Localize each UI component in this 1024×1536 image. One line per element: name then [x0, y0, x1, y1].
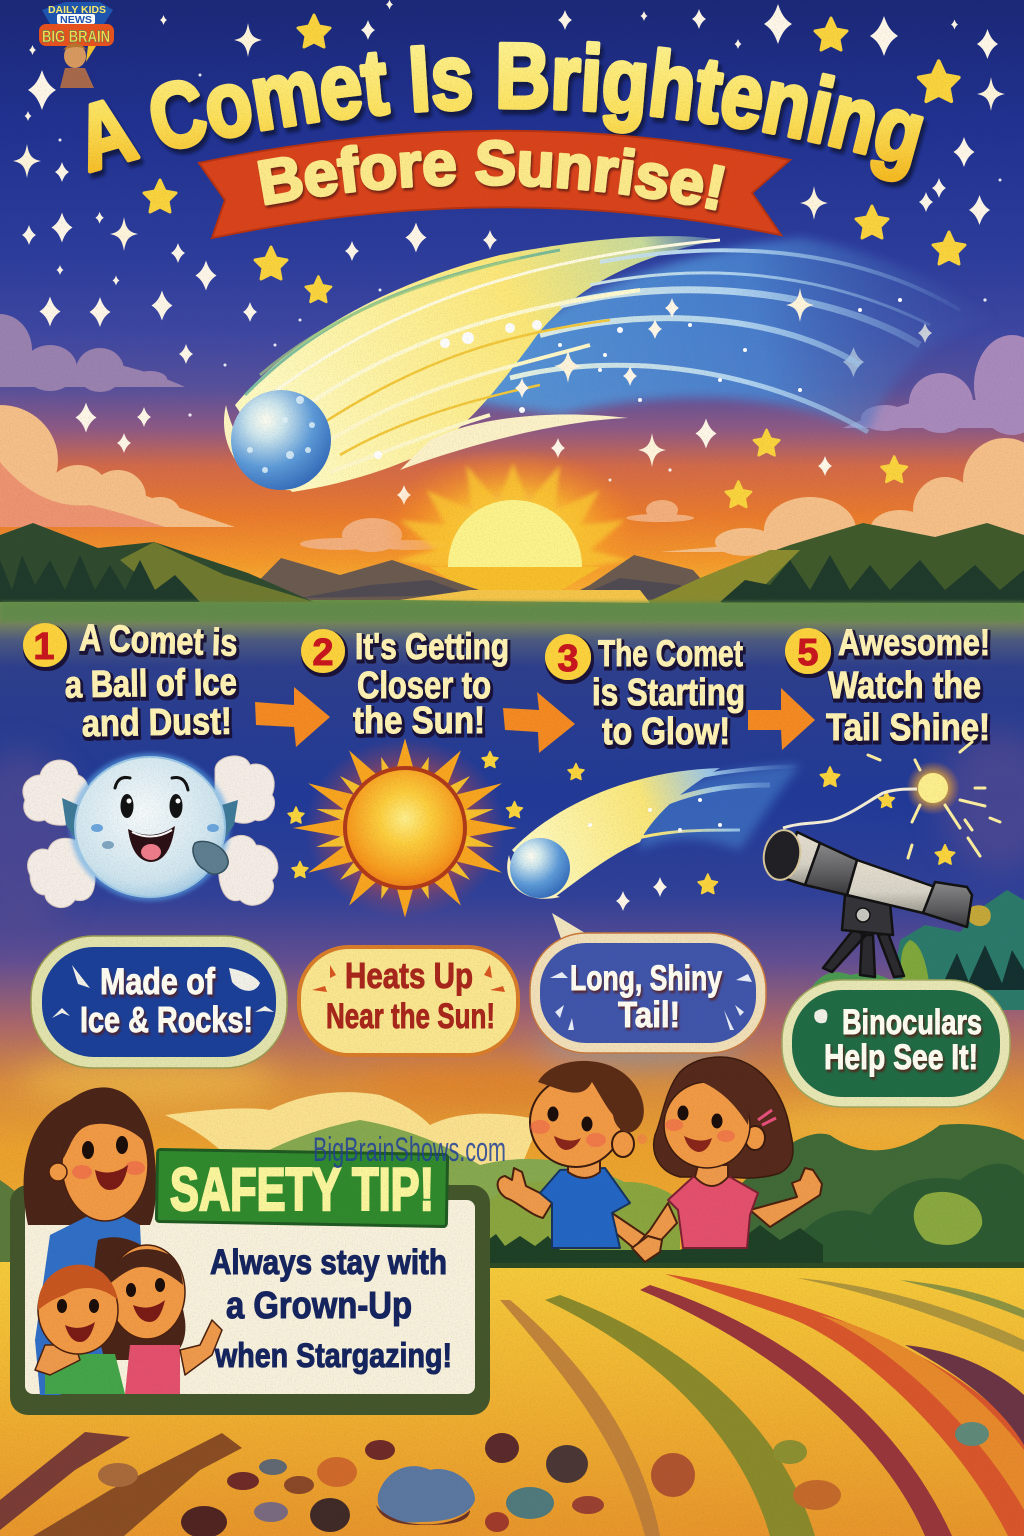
safety tip message: when Stargazing!: [214, 1337, 452, 1375]
clouds around the comet: [23, 756, 278, 908]
speech bubble: Made of Ice & Rocks!: Ice & Rocks!: [80, 999, 253, 1040]
spark burst viewed by telescope: [783, 742, 1000, 858]
main title: A Comet Is Brightening: [88, 40, 928, 189]
step 3 caption: The Comet is Starting to Glow!: [545, 633, 745, 753]
speech bubble: Long, Shiny Tail!: Tail!: [618, 994, 680, 1035]
ground strip under mountains: [0, 602, 1024, 622]
two children holding hands: [488, 1057, 823, 1263]
arrow: step 2 to 3: [503, 692, 575, 753]
speech bubble: Heats Up Near the Sun!: Near the Sun!: [326, 997, 495, 1036]
step 1 number badge: 1: [33, 626, 55, 668]
logo: Daily Kids News Big Brain: [39, 2, 114, 88]
subtitle ribbon: [197, 130, 792, 240]
golden striped field: [0, 1262, 1024, 1536]
step 5 caption: Awesome! Watch the Tail Shine!: Awesome!: [838, 622, 990, 663]
big sun with spiky rays: [288, 738, 522, 918]
watermark: BigBrainShows.com: [313, 1131, 506, 1169]
step 5 number badge: 5: [797, 632, 819, 674]
speech bubble: Heats Up Near the Sun!: Heats Up: [345, 955, 473, 996]
speech bubble: Made of Ice & Rocks!: [31, 936, 287, 1068]
green hill behind telescope: [810, 890, 1024, 1010]
safety tip message: [210, 1243, 452, 1375]
step 3 caption: The Comet is Starting to Glow!: The Comet: [598, 633, 743, 674]
small glowing comet: [507, 765, 800, 899]
speech bubble: Long, Shiny Tail!: [530, 913, 766, 1053]
small stars around comet and telescope: [568, 764, 955, 911]
speech bubble: Binoculars Help See It!: Help See It!: [824, 1038, 978, 1077]
step 2 caption: It's Getting Closer to the Sun!: the Sun!: [353, 700, 485, 742]
distant hills and pale cloud behind the children: [0, 1092, 1024, 1262]
safety tip banner: [156, 1149, 448, 1227]
step 1 number badge: [23, 623, 67, 668]
girl: [635, 1057, 822, 1252]
mountain range and treeline: [0, 523, 1024, 603]
step 2 caption: It's Getting Closer to the Sun!: Closer to: [357, 665, 491, 707]
speech bubble: Binoculars Help See It!: [782, 980, 1010, 1107]
clouds in dawn sky: [0, 314, 1024, 563]
subtitle ribbon: Before Sunrise!: [257, 139, 728, 214]
arrow: step 3 to 5: [748, 688, 815, 750]
panel paper: [25, 1200, 475, 1394]
logo: Daily Kids News Big Brain: NEWS: [60, 15, 92, 26]
boy: [498, 1061, 649, 1250]
mother and two children: [24, 1087, 222, 1395]
star field: [13, 0, 1005, 507]
telescope on tripod: [760, 827, 972, 977]
step 5 caption: Awesome! Watch the Tail Shine!: [785, 622, 990, 749]
safety tip banner: SAFETY TIP!: [170, 1156, 434, 1223]
step 3 caption: The Comet is Starting to Glow!: is Starting: [592, 672, 745, 714]
step 1 caption: A Comet is a Ball of Ice and Dust!: and Dust!: [81, 701, 232, 745]
speech bubble: Binoculars Help See It!: Binoculars: [842, 1003, 982, 1042]
step 3 caption: The Comet is Starting to Glow!: to Glow!: [602, 711, 730, 753]
speech bubble: Heats Up Near the Sun!: [297, 945, 520, 1057]
smiling ice-and-rock comet character: [23, 753, 278, 908]
arrow: step 1 to 2: [255, 687, 330, 747]
step 2 number badge: 2: [312, 632, 334, 674]
logo: Daily Kids News Big Brain: BIG BRAIN: [42, 27, 110, 46]
grass strip: [488, 1225, 823, 1263]
background: warm blotches in the lower band: [0, 730, 1024, 1145]
step 5 caption: Awesome! Watch the Tail Shine!: Tail Shine!: [826, 707, 990, 749]
background: middle band from deep blue to orange: [0, 600, 1024, 1270]
step 1 caption: A Comet is a Ball of Ice and Dust!: A Comet is: [79, 617, 238, 665]
background: night-to-dawn sky: [0, 0, 1024, 605]
speech bubble: Long, Shiny Tail!: Long, Shiny: [570, 959, 722, 998]
speech bubble: Made of Ice & Rocks!: Made of: [100, 961, 216, 1002]
safety tip message: a Grown-Up: [226, 1285, 412, 1327]
step 2 caption: It's Getting Closer to the Sun!: [301, 626, 509, 742]
safety tip message: Always stay with: [210, 1243, 447, 1282]
step 5 number badge: [785, 628, 831, 674]
step 5 caption: Awesome! Watch the Tail Shine!: Watch the: [828, 665, 981, 707]
main comet with long tail: [224, 236, 1000, 492]
rising sun: [383, 448, 643, 612]
step 1 caption: A Comet is a Ball of Ice and Dust!: [23, 617, 238, 745]
logo: Daily Kids News Big Brain: DAILY KIDS: [48, 5, 106, 16]
field stones: [98, 1422, 989, 1536]
step 2 caption: It's Getting Closer to the Sun!: It's Getting: [355, 626, 509, 667]
step 2 number badge: [301, 629, 345, 674]
step 3 number badge: [545, 634, 591, 680]
step 3 number badge: 3: [557, 638, 579, 680]
safety tip panel: [10, 1087, 490, 1415]
step 1 caption: A Comet is a Ball of Ice and Dust!: a Ball of Ice: [64, 661, 237, 706]
panel frame: [10, 1185, 490, 1415]
